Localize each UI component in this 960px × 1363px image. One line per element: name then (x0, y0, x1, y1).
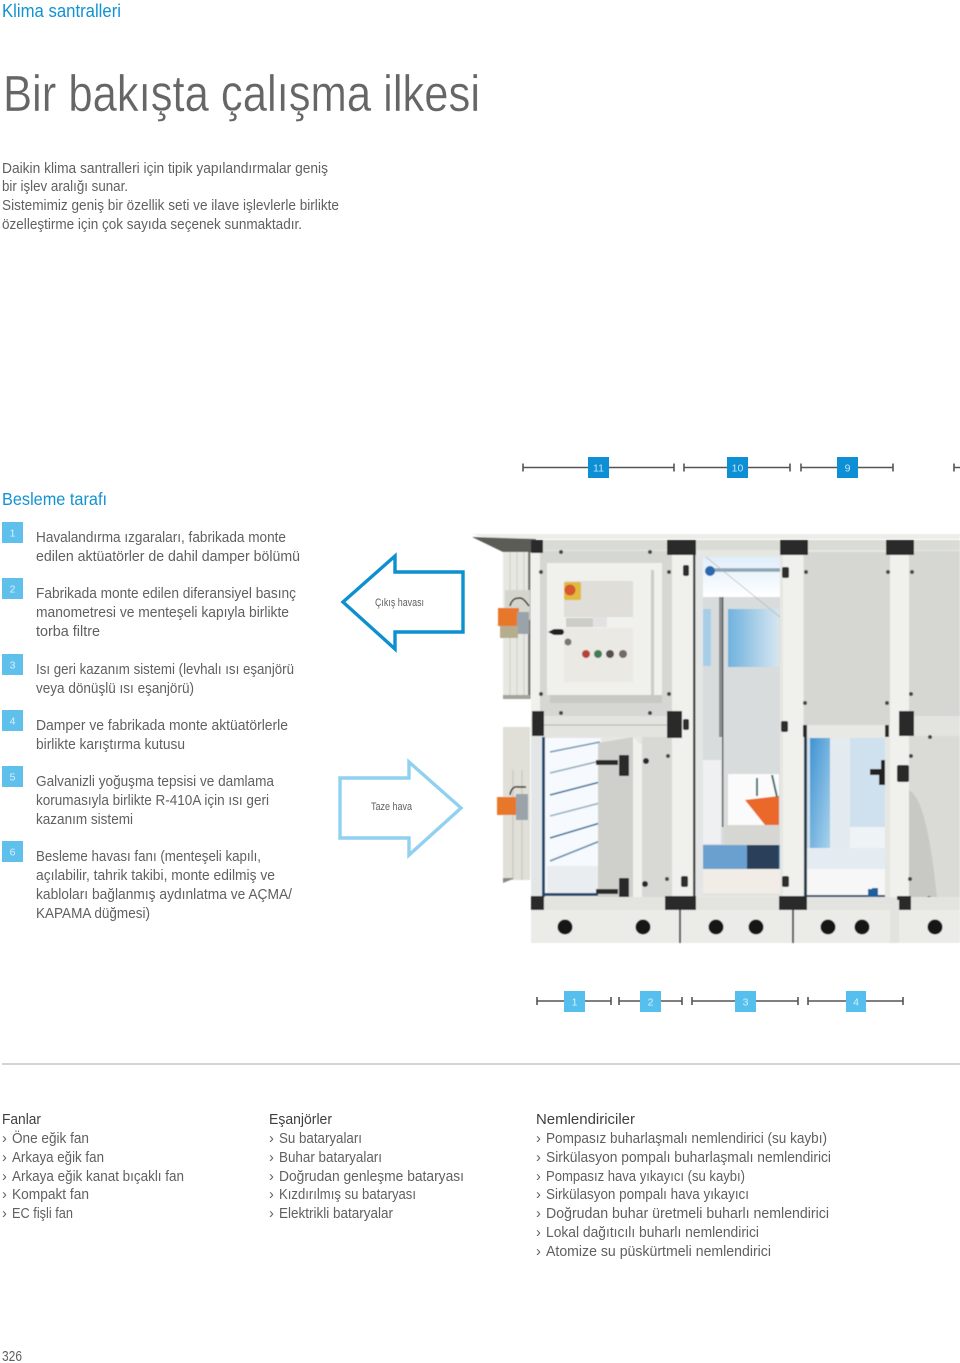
middle rail (531, 716, 960, 737)
bottom dimension scale (537, 991, 903, 1012)
bottom frame rail (531, 897, 960, 910)
actuator upper (498, 598, 529, 638)
lower view (728, 774, 779, 825)
section label: Klima santralleri (2, 1, 121, 21)
item 5: kazanım sistemi (36, 812, 133, 828)
arrow: fresh air (340, 762, 461, 855)
item 6: 6 (10, 846, 16, 858)
intro text (2, 161, 339, 233)
item 2: Fabrikada monte edilen diferansiyel basınç (36, 586, 296, 602)
damper section upper (503, 552, 530, 699)
list: humidifiers: Pompasız hava yıkayıcı (su kaybı) (546, 1169, 745, 1185)
item 2: 2 (10, 584, 16, 596)
list: humidifiers: › (536, 1244, 541, 1260)
intro text: Daikin klima santralleri için tipik yapılandırmalar geniş (2, 161, 328, 177)
item 6: Besleme havası fanı (menteşeli kapılı, (36, 849, 261, 865)
open section right (804, 737, 909, 922)
list: fans: › (2, 1150, 7, 1166)
heading: supply side: Besleme tarafı (2, 489, 107, 509)
door handle (548, 629, 560, 635)
item 3: veya dönüşlü ısı eşanjörü) (36, 681, 194, 697)
list: heat exchangers: › (269, 1206, 274, 1222)
list: heat exchangers: › (269, 1169, 274, 1185)
item 6: açılabilir, tahrik takibi, monte edilmiş ve (36, 868, 275, 884)
bottom dimension scale: 4 (853, 996, 859, 1008)
list: humidifiers: Atomize su püskürtmeli nemlendirici (546, 1244, 771, 1260)
item 1 (2, 522, 300, 565)
item 2 (2, 578, 296, 640)
list: humidifiers: › (536, 1150, 541, 1166)
base rail with holes (531, 900, 960, 943)
top frame rail (531, 540, 960, 551)
screws (539, 550, 671, 715)
list: heat exchangers: Su bataryaları (279, 1131, 362, 1147)
list: fans: Öne eğik fan (12, 1129, 89, 1147)
bottom dimension scale: 1 (572, 996, 578, 1008)
list: heat exchangers: › (269, 1150, 274, 1166)
list: fans: EC fişli fan (12, 1206, 73, 1222)
roof (472, 534, 960, 552)
indicator lights (582, 650, 590, 658)
item 6 (2, 841, 293, 922)
list: heat exchangers: Elektrikli bataryalar (279, 1206, 393, 1222)
list: humidifiers: Pompasız buharlaşmalı nemlendirici (su kaybı) (546, 1131, 827, 1147)
list: heat exchangers: › (269, 1131, 274, 1147)
arrow: exhaust air: Çıkış havası (375, 597, 424, 609)
intro text: bir işlev aralığı sunar. (2, 179, 128, 195)
item 4: 4 (10, 716, 16, 728)
list: heat exchangers (269, 1112, 464, 1222)
list: fans: Arkaya eğik fan (12, 1150, 104, 1166)
item 5: Galvanizli yoğuşma tepsisi ve damlama (36, 774, 275, 790)
list: heat exchangers: Doğrudan genleşme bataryası (279, 1169, 464, 1185)
item 4 (2, 710, 288, 753)
list: fans: › (2, 1187, 7, 1203)
blank panels upper (803, 551, 960, 911)
item 3: Isı geri kazanım sistemi (levhalı ısı eşanjörü (36, 662, 294, 678)
main switch (564, 582, 581, 600)
list: humidifiers (536, 1112, 831, 1260)
item 1: 1 (10, 528, 16, 540)
list: fans: › (2, 1169, 7, 1185)
numbered list: supply side components (2, 522, 300, 922)
arrow: exhaust air (343, 556, 463, 649)
list: humidifiers: Doğrudan buhar üretmeli buharlı nemlendirici (546, 1206, 829, 1222)
item 2: torba filtre (36, 624, 100, 640)
list: humidifiers: Sirkülasyon pompalı hava yıkayıcı (546, 1187, 749, 1203)
list: fans: › (2, 1206, 7, 1222)
photo: air handling unit (472, 534, 960, 943)
list: heat exchangers: › (269, 1187, 274, 1203)
top dimension scale: 10 (732, 462, 743, 474)
list: humidifiers: › (536, 1131, 541, 1147)
door latches (596, 755, 649, 899)
list: humidifiers: › (536, 1187, 541, 1203)
list: humidifiers: Lokal dağıtıcılı buharlı nemlendirici (546, 1225, 759, 1241)
list: fans: › (2, 1131, 7, 1147)
open section with slats (531, 737, 672, 915)
top dimension scale: 9 (845, 462, 851, 474)
list: heat exchangers: Eşanjörler (269, 1112, 332, 1128)
item 4: birlikte karıştırma kutusu (36, 737, 185, 753)
top dimension scale (523, 457, 960, 478)
bottom dimension scale: 2 (648, 996, 654, 1008)
list: humidifiers: Nemlendiriciler (536, 1112, 635, 1128)
panel behind door (642, 737, 672, 900)
arrow: fresh air: Taze hava (371, 801, 413, 813)
top dimension scale: 11 (593, 462, 604, 474)
title: Bir bakışta çalışma ilkesi (3, 65, 480, 122)
item 5: 5 (10, 772, 16, 784)
black corner blocks (531, 540, 914, 910)
item 5 (2, 766, 275, 828)
open door upper view (672, 551, 803, 912)
blank panel lower right (908, 735, 960, 900)
item 2: manometresi ve menteşeli kapıyla birlikte (36, 605, 289, 621)
item 1: Havalandırma ızgaraları, fabrikada monte (36, 530, 286, 546)
list: fans: Fanlar (2, 1112, 41, 1128)
control panel section (531, 550, 672, 726)
main body background (531, 550, 960, 910)
list: heat exchangers: Buhar bataryaları (279, 1150, 382, 1166)
damper section lower (497, 727, 530, 883)
list: fans (2, 1112, 184, 1222)
item 3 (2, 654, 294, 697)
intro text: özelleştirme için çok sayıda seçenek sunmaktadır. (2, 217, 302, 233)
list: fans: Kompakt fan (12, 1187, 89, 1203)
item 5: korumasıyla birlikte R-410A için ısı geri (36, 793, 269, 809)
open door leaf (598, 737, 642, 915)
list: humidifiers: › (536, 1169, 541, 1185)
list: heat exchangers: Kızdırılmış su bataryası (279, 1187, 416, 1203)
latches (870, 760, 885, 785)
list: humidifiers: › (536, 1225, 541, 1241)
item 6: KAPAMA düğmesi) (36, 906, 150, 922)
list: humidifiers: › (536, 1206, 541, 1222)
item 3: 3 (10, 660, 16, 672)
door latches (681, 565, 789, 887)
item 6: kabloları bağlanmış aydınlatma ve AÇMA/ (36, 887, 293, 903)
list: humidifiers: Sirkülasyon pompalı buharlaşmalı nemlendirici (546, 1150, 831, 1166)
intro text: Sistemimiz geniş bir özellik seti ve ilave işlevlerle birlikte (2, 198, 339, 214)
item 4: Damper ve fabrikada monte aktüatörlerle (36, 718, 288, 734)
bottom dimension scale: 3 (743, 996, 749, 1008)
list: fans: Arkaya eğik kanat bıçaklı fan (12, 1169, 184, 1185)
item 1: edilen aktüatörler de dahil damper bölümü (36, 549, 300, 565)
control window (564, 581, 633, 682)
